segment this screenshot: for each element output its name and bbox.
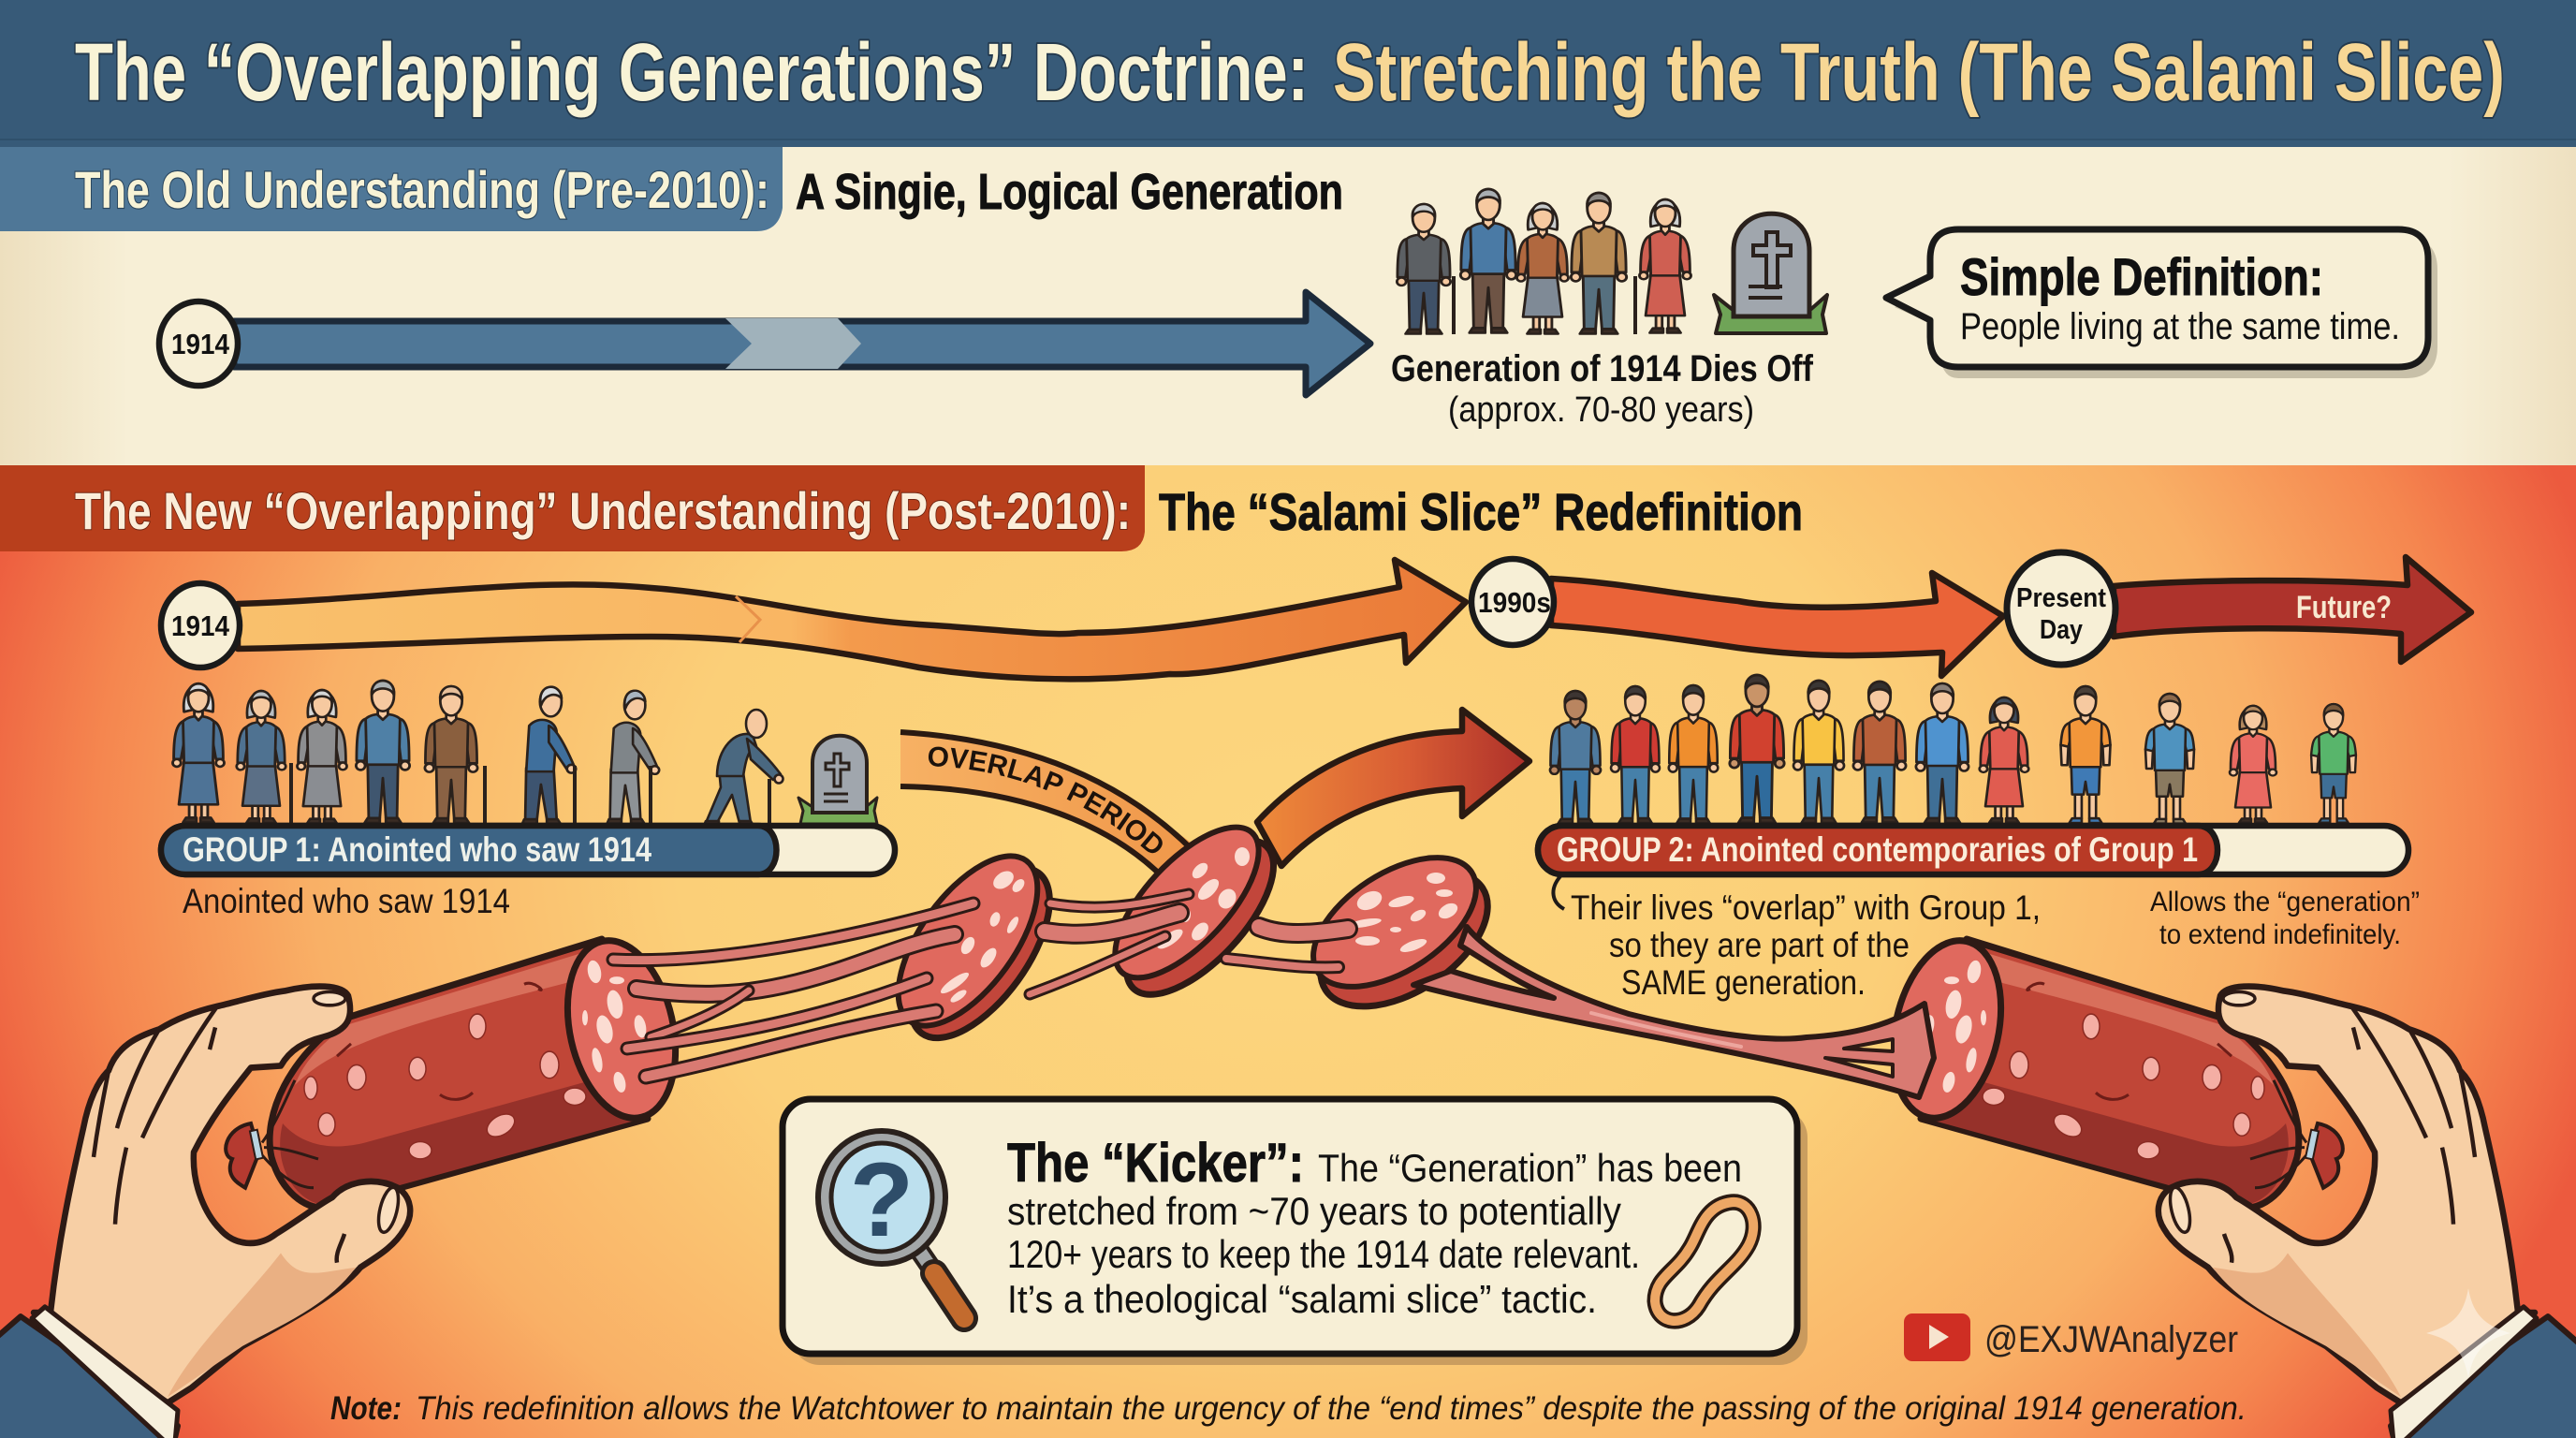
1914 circle xyxy=(161,583,240,668)
person xyxy=(1669,685,1718,824)
boy xyxy=(2311,704,2356,823)
old understanding heading tab xyxy=(0,147,783,231)
icon: stretched rubber band xyxy=(1655,1202,1753,1321)
callout: simple definition: Simple Definition: xyxy=(1960,247,2323,306)
elderly man with cane xyxy=(1397,204,1454,334)
girl xyxy=(1980,697,2028,823)
woman in grey xyxy=(298,690,346,824)
1914 circle: 1914 xyxy=(171,609,230,642)
elderly woman in red xyxy=(1640,199,1690,333)
bent man xyxy=(704,710,783,826)
kicker text: stretched from ~70 years to potentially xyxy=(1007,1189,1621,1233)
man in brown with cane xyxy=(425,686,485,824)
stooped man xyxy=(522,687,576,824)
group 1 bar xyxy=(161,826,895,874)
wavy timeline arrow 1990s to present xyxy=(1471,559,2003,676)
group 2 explanation xyxy=(1553,876,2041,1002)
left hand holding salami xyxy=(0,987,410,1438)
group 2 explanation: SAME generation. xyxy=(1621,963,1866,1002)
1990s circle xyxy=(1471,559,1554,645)
callout: simple definition xyxy=(1886,229,2437,378)
footnote: This redefinition allows the Watchtower to maintain the urgency of the “end times” despite the passing of the original 1914 generation. xyxy=(416,1390,2247,1427)
youtube handle xyxy=(1904,1313,2238,1361)
1914 circle: 1914 xyxy=(171,328,230,360)
present day circle xyxy=(2007,552,2115,665)
title: The “Overlapping Generations” Doctrine: xyxy=(75,27,1309,118)
1990s circle: 1990s xyxy=(1478,586,1551,619)
kicker text xyxy=(1007,1133,1742,1321)
1914 circle xyxy=(159,301,238,386)
woman with cane xyxy=(237,691,291,824)
person xyxy=(1916,683,1969,823)
woman xyxy=(172,683,225,822)
group 1 bar: GROUP 1: Anointed who saw 1914 xyxy=(183,830,651,869)
generation dies off caption: (approx. 70-80 years) xyxy=(1448,390,1754,430)
group 1 caption: Anointed who saw 1914 xyxy=(183,882,510,920)
new understanding heading tab: The New “Overlapping” Understanding (Post-2010): xyxy=(75,481,1131,540)
girl xyxy=(2230,706,2276,823)
group 2 explanation: Their lives “overlap” with Group 1, xyxy=(1571,888,2041,927)
person xyxy=(1550,691,1601,824)
kicker text: It’s a theological “salami slice” tactic. xyxy=(1007,1277,1597,1321)
old timeline arrow xyxy=(159,292,1370,395)
group 2 explanation: so they are part of the xyxy=(1609,926,1910,964)
elderly man in blue xyxy=(1460,189,1516,332)
elderly man in tan xyxy=(1571,193,1635,334)
extend indefinitely note: Allows the “generation” xyxy=(2150,887,2420,917)
strands: salami to slice 1 xyxy=(613,903,973,1077)
strands: slice 3 to right salami xyxy=(1413,927,1934,1097)
person xyxy=(1730,675,1784,823)
elderly woman xyxy=(1516,203,1569,334)
kicker text: 120+ years to keep the 1914 date relevant. xyxy=(1007,1232,1640,1276)
group of elderly people, generation of 1914 xyxy=(1397,189,1690,334)
person xyxy=(1853,682,1906,822)
boy xyxy=(2145,694,2194,824)
header band xyxy=(0,0,2576,147)
icon: small gravestone xyxy=(798,736,877,824)
generation dies off caption xyxy=(1391,348,1814,430)
icon: magnifying glass with question mark xyxy=(818,1131,964,1318)
person xyxy=(1793,681,1844,823)
man in blue xyxy=(356,681,410,823)
footnote: Note: xyxy=(330,1390,402,1427)
new understanding heading tab xyxy=(0,465,1145,551)
cream old-understanding panel xyxy=(0,140,2576,468)
icon: magnifying glass with question mark: ? xyxy=(850,1141,914,1258)
kicker text: The “Kicker”: xyxy=(1007,1133,1304,1194)
overlap period curved band: OVERLAP PERIOD xyxy=(929,747,1163,854)
right hand holding salami xyxy=(2159,987,2576,1438)
icon: youtube xyxy=(1904,1313,1970,1361)
kicker box xyxy=(783,1099,1808,1365)
extend indefinitely note xyxy=(2150,887,2420,950)
strands: slice 1 to slice 2 xyxy=(1030,894,1189,994)
left salami xyxy=(226,930,692,1208)
icon: gravestone xyxy=(1714,213,1827,333)
slice 2 xyxy=(1091,804,1298,1018)
kicker text: The “Generation” has been xyxy=(1318,1146,1742,1190)
person xyxy=(1611,686,1660,823)
generation dies off caption: Generation of 1914 Dies Off xyxy=(1391,348,1814,389)
title xyxy=(75,27,2505,118)
callout: simple definition: People living at the same time. xyxy=(1960,306,2400,347)
present day circle: Day xyxy=(2040,615,2083,645)
wavy timeline arrow 1914 to 1990s xyxy=(161,560,1466,679)
group 2 contemporaries xyxy=(1550,675,2356,824)
old understanding subheading: A Singie, Logical Generation xyxy=(796,164,1343,220)
stooped woman xyxy=(607,691,659,824)
boy xyxy=(2060,686,2111,823)
slice 3 xyxy=(1291,831,1511,1034)
slice 1 xyxy=(871,833,1076,1061)
present day circle: Present xyxy=(2016,583,2106,613)
strands: slice 2 to slice 3 xyxy=(1226,927,1348,967)
old understanding heading tab: The Old Understanding (Pre-2010): xyxy=(75,160,769,219)
sparkle watermark xyxy=(2426,1288,2510,1378)
right salami xyxy=(1877,930,2343,1208)
youtube handle: @EXJWAnalyzer xyxy=(1984,1319,2238,1360)
group 2 bar: GROUP 2: Anointed contemporaries of Group 1 xyxy=(1557,830,2198,869)
future label: Future? xyxy=(2296,590,2392,625)
timeline arrow present to future xyxy=(2007,552,2471,665)
extend indefinitely note: to extend indefinitely. xyxy=(2159,919,2401,950)
curved arrow to group 2 xyxy=(1257,710,1530,866)
warm new-understanding background xyxy=(0,465,2576,1438)
group 1 people aging xyxy=(172,681,783,826)
new understanding subheading: The “Salami Slice” Redefinition xyxy=(1159,482,1803,541)
stretched meat strands xyxy=(613,894,1934,1097)
